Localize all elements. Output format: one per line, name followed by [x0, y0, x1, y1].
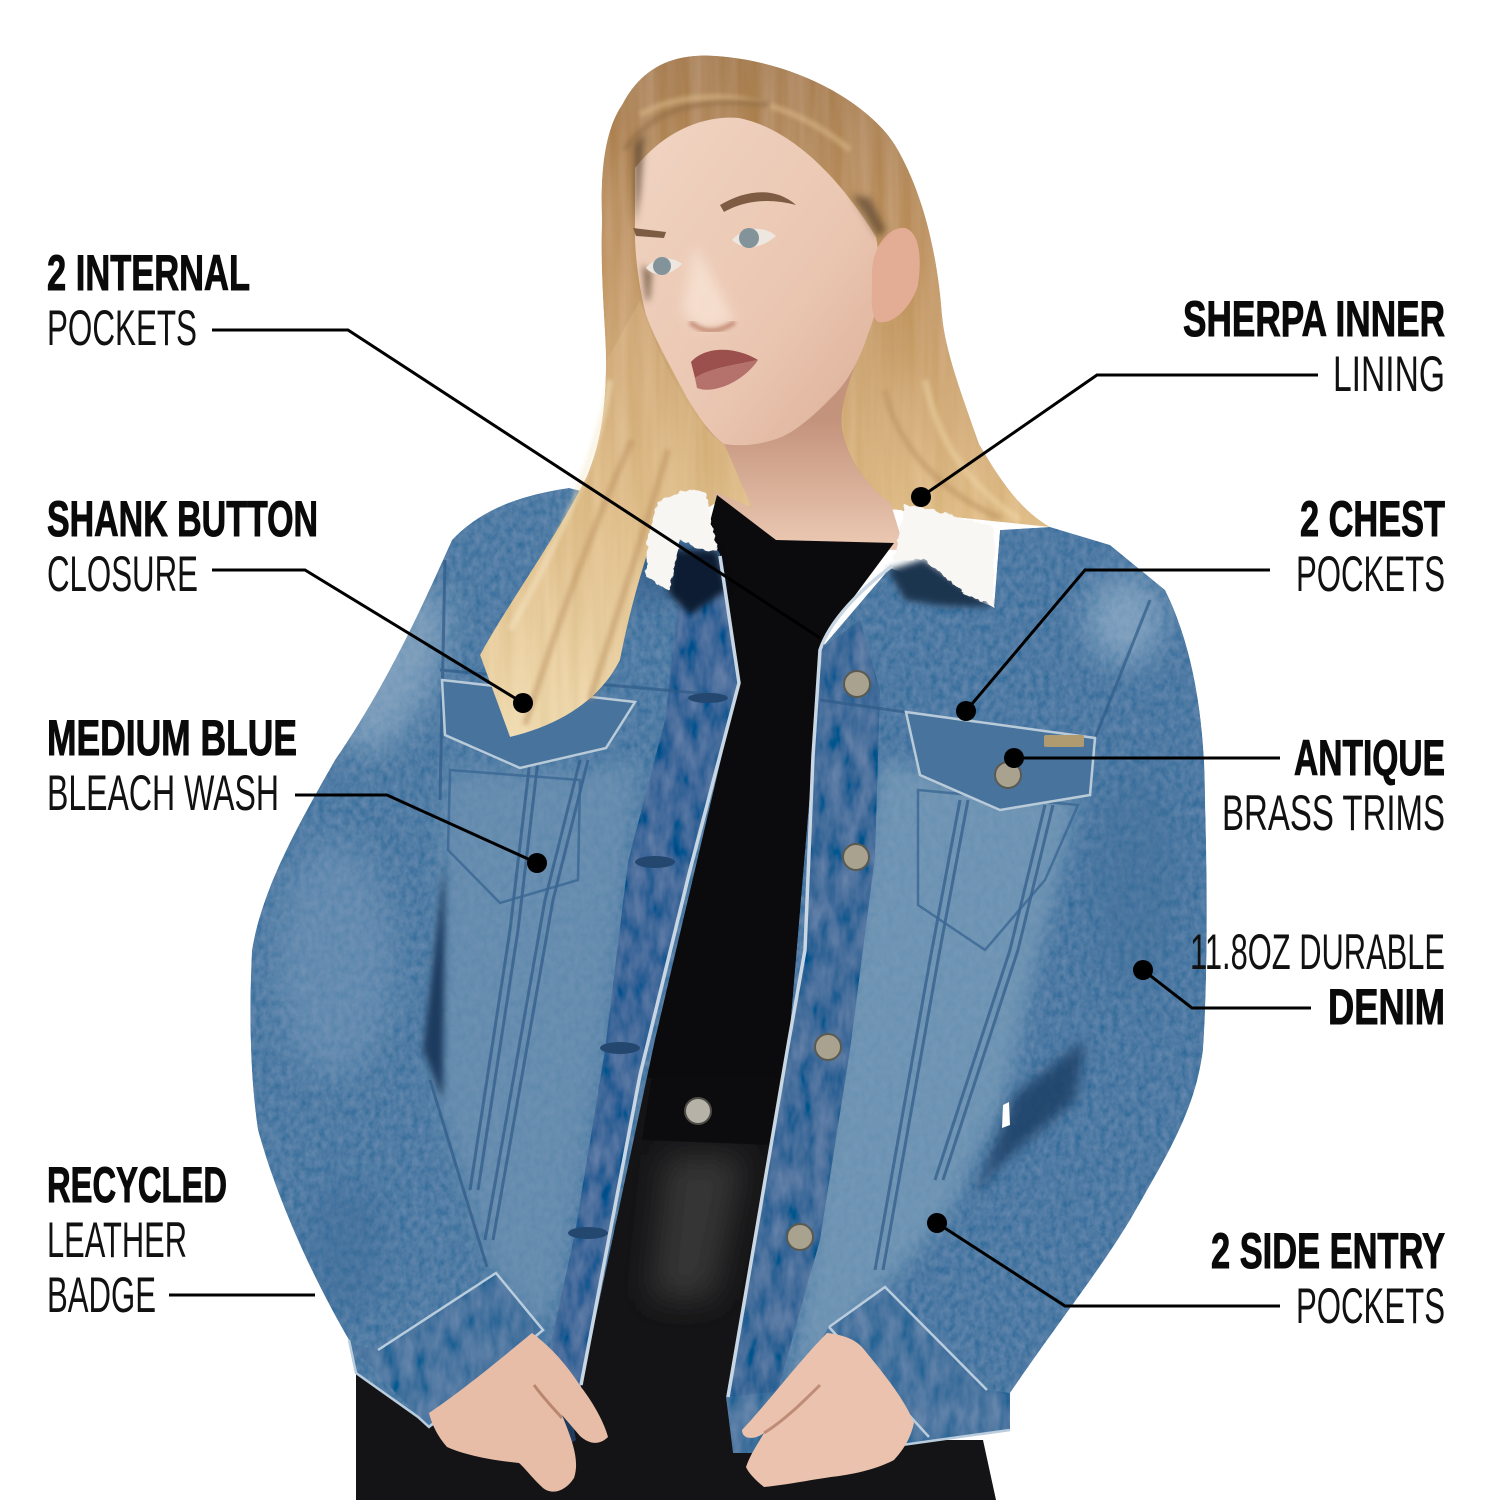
- cuff edges: viewer right: [829, 1287, 1010, 1445]
- underarm shadow: viewer right: [975, 1040, 1085, 1195]
- callout: recycled leather badge: [47, 1157, 315, 1323]
- sleeve patches: [342, 578, 461, 764]
- cuff edges: viewer left: [349, 1273, 543, 1427]
- brows: [633, 192, 796, 238]
- chest flap: viewer left: [442, 680, 635, 768]
- black tee: [640, 495, 894, 1078]
- mottled placket and cuffs: [350, 560, 1010, 1453]
- textured jacket base: [250, 488, 1207, 1453]
- shadow under collar: viewer right: [888, 559, 994, 607]
- hair, back layer: [480, 55, 1050, 737]
- right cuff and hem: [726, 1287, 1010, 1453]
- left finger crease: [534, 1385, 562, 1418]
- hem fold between fingers: [540, 1385, 576, 1450]
- nose underside: [690, 322, 735, 331]
- callout: 2 side entry pockets: [927, 1213, 1445, 1334]
- callout: medium blue bleach wash: [47, 710, 547, 873]
- callout: 11.8oz durable denim: DENIM: [1328, 979, 1445, 1035]
- callout: 2 internal pockets: [47, 245, 820, 638]
- black jeans: [356, 1075, 996, 1500]
- hand: viewer right: [742, 1333, 914, 1487]
- figure: woman wearing denim sherpa jacket: [250, 55, 1207, 1500]
- armhole gap: [1002, 1102, 1010, 1128]
- callout: shank button closure: SHANK BUTTON: [47, 491, 318, 547]
- back of right hand and fingers: [742, 1333, 914, 1487]
- right finger crease: [764, 1385, 820, 1433]
- callout: medium blue bleach wash: MEDIUM BLUE: [47, 710, 297, 766]
- neck: [700, 330, 905, 550]
- right panel and sleeve base: [726, 527, 1207, 1453]
- face: [635, 118, 880, 445]
- waistband: [642, 1075, 785, 1145]
- faded jeans front: [650, 1155, 745, 1300]
- hair strand highlights: [510, 97, 1020, 725]
- body tones: [430, 760, 640, 1330]
- pocket: viewer left: [448, 770, 580, 903]
- soft patches: [275, 520, 1180, 1320]
- denim jacket: [250, 488, 1207, 1453]
- back of left hand and fingers: [429, 1333, 608, 1492]
- callout: sherpa inner lining: [911, 291, 1445, 507]
- callout: 2 internal pockets: POCKETS: [47, 300, 197, 356]
- hand: viewer left: [429, 1333, 608, 1492]
- left cuff: [350, 1273, 543, 1427]
- callout: recycled leather badge: LEATHER: [47, 1212, 187, 1268]
- underarm shadow: viewer left: [423, 860, 445, 1100]
- eyes: [646, 228, 776, 275]
- callout: recycled leather badge: RECYCLED: [47, 1157, 227, 1213]
- sherpa collar: viewer right: [894, 504, 994, 607]
- placket stitched edges: [581, 556, 892, 1397]
- callout: medium blue bleach wash: BLEACH WASH: [47, 765, 279, 821]
- hair, front left strands: [480, 300, 752, 737]
- right placket: [728, 620, 880, 1400]
- callout: 2 chest pockets: [956, 491, 1445, 721]
- lips: [691, 350, 758, 390]
- chest flap: viewer right: [906, 712, 1095, 810]
- seams: [430, 560, 1150, 1270]
- callout: antique brass trims: [1004, 730, 1445, 841]
- buttonholes: [568, 693, 728, 1239]
- pocket: viewer right: [918, 790, 1078, 950]
- callout: 11.8oz durable denim: [1133, 924, 1445, 1035]
- nose shading: [682, 245, 735, 330]
- callout: 2 internal pockets: 2 INTERNAL: [47, 245, 250, 301]
- hair, front right strands: [841, 315, 1050, 527]
- buttons: [787, 671, 1021, 1250]
- callout: shank button closure: CLOSURE: [47, 546, 198, 602]
- left panel and sleeve base: [250, 488, 739, 1427]
- sherpa collar: viewer left: [646, 490, 717, 591]
- ear: [872, 228, 920, 322]
- callout: sherpa inner lining: LINING: [1333, 346, 1445, 402]
- shadow under collar: viewer left: [668, 550, 727, 615]
- jeans button: [685, 1098, 711, 1124]
- left placket: [545, 560, 739, 1385]
- brass label: [1044, 735, 1084, 747]
- callout: recycled leather badge: BADGE: [47, 1267, 156, 1323]
- hair shadows around face: [634, 132, 886, 302]
- pants base: [356, 1075, 996, 1500]
- wash shading, clipped to jacket: [275, 520, 1180, 1390]
- blurred tones: [430, 760, 1080, 1390]
- callout: shank button closure: [47, 491, 533, 713]
